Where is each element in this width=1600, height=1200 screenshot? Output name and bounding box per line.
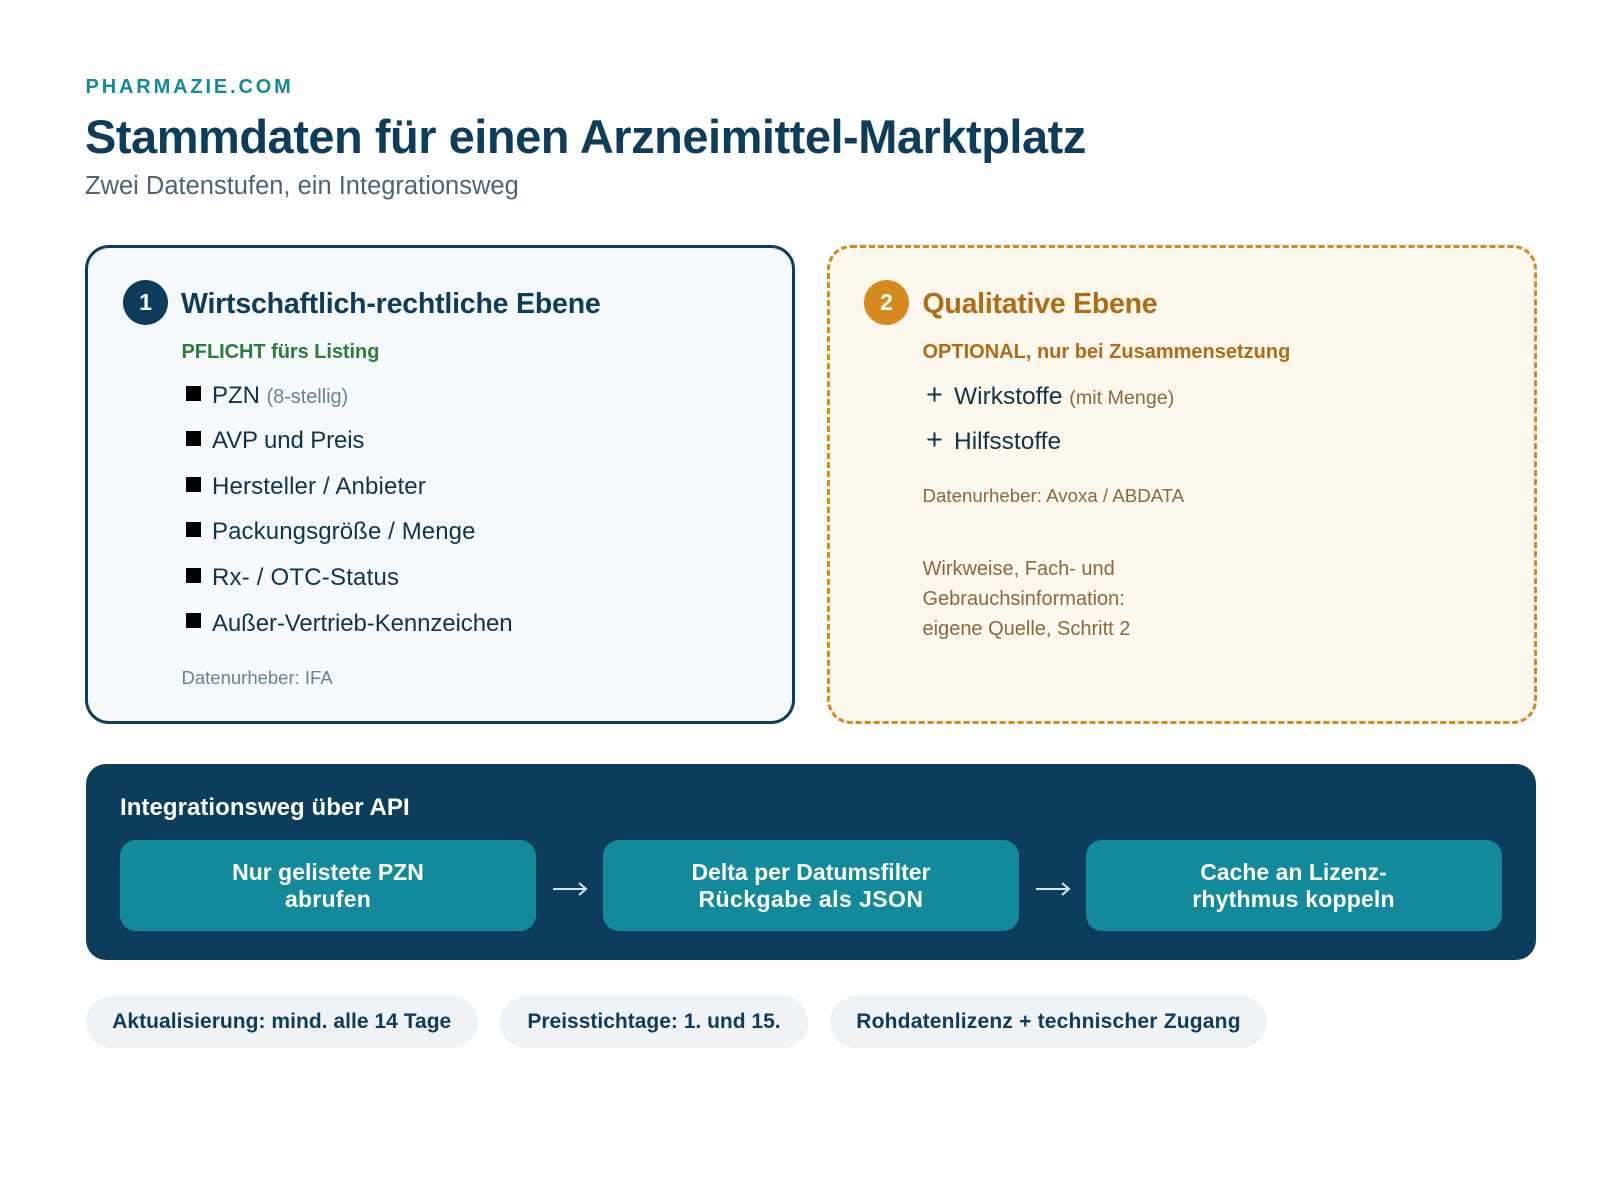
step 2 — [603, 840, 1019, 931]
badge 2: 2 — [880, 289, 893, 315]
list: Pflichtfelder — [212, 382, 512, 636]
pill: Rohdatenlizenz: Rohdatenlizenz + technischer Zugang — [856, 1010, 1241, 1033]
badge 1: 1 — [139, 289, 152, 315]
item: Hersteller: Hersteller / Anbieter — [212, 472, 426, 500]
item: Hilfsstoffe: Hilfsstoffe — [954, 428, 1061, 455]
step 1: abrufen — [285, 886, 371, 912]
item: Packungsgröße: Packungsgröße / Menge — [212, 518, 476, 545]
note: Wirkweise — [922, 558, 1130, 640]
note: Wirkweise: eigene Quelle, Schritt 2 — [922, 618, 1130, 640]
item: PZN: PZN (8-stellig) — [212, 382, 348, 409]
item: AVP: AVP und Preis — [212, 427, 364, 454]
heading: Integrationsweg: Integrationsweg über API — [120, 794, 410, 821]
arrow 2 — [1036, 882, 1070, 896]
heading: panel 2: Qualitative Ebene — [922, 288, 1157, 320]
step 2: Rückgabe als JSON — [698, 886, 923, 912]
pill: Preisstichtage — [500, 996, 808, 1048]
step 3 — [1086, 840, 1502, 931]
heading: panel 1: Wirtschaftlich-rechtliche Ebene — [181, 288, 601, 320]
step 2: Delta per Datumsfilter — [691, 858, 930, 884]
item: Wirkstoffe: + — [926, 378, 943, 410]
step 1: Nur gelistete PZN — [232, 858, 424, 884]
pill: Aktualisierung: Aktualisierung: mind. alle 14 Tage — [112, 1010, 451, 1033]
panel: qualitative Ebene — [827, 245, 1536, 724]
eyebrow: brand: PHARMAZIE.COM — [86, 76, 294, 98]
source note: Avoxa: Datenurheber: Avoxa / ABDATA — [922, 485, 1184, 506]
item: Hilfsstoffe: + — [926, 424, 943, 456]
item: Hilfsstoffe — [926, 424, 1061, 456]
item: Außer-Vertrieb: Außer-Vertrieb-Kennzeichen — [212, 610, 512, 636]
source note: IFA: Datenurheber: IFA — [182, 667, 333, 688]
tag: Optional: OPTIONAL, nur bei Zusammensetzung — [922, 341, 1290, 363]
title: Stammdaten für einen Arzneimittel-Marktplatz — [85, 110, 1086, 163]
note: Wirkweise: Gebrauchsinformation: — [922, 588, 1125, 610]
note: Wirkweise: Wirkweise, Fach- und — [922, 558, 1115, 580]
pill: Aktualisierung — [86, 996, 478, 1048]
step 3: Cache an Lizenz- — [1200, 858, 1387, 884]
step 3: rhythmus koppeln — [1192, 886, 1395, 912]
badge 2 — [864, 280, 909, 325]
subtitle: Zwei Datenstufen, ein Integrationsweg — [85, 172, 519, 200]
item: Wirkstoffe: Wirkstoffe (mit Menge) — [954, 382, 1174, 410]
pill: Preisstichtage: Preisstichtage: 1. und 15. — [527, 1010, 781, 1033]
arrow 1 — [553, 882, 588, 896]
bullet markers — [186, 386, 201, 628]
badge 1 — [123, 280, 168, 325]
panel: wirtschaftlich-rechtliche Ebene — [85, 245, 794, 724]
item: Status: Rx- / OTC-Status — [212, 564, 399, 591]
step 1 — [120, 840, 536, 931]
tag: Pflicht: PFLICHT fürs Listing — [182, 341, 379, 363]
panel: Integrationsweg — [86, 764, 1536, 960]
pill: Rohdatenlizenz — [830, 996, 1267, 1048]
